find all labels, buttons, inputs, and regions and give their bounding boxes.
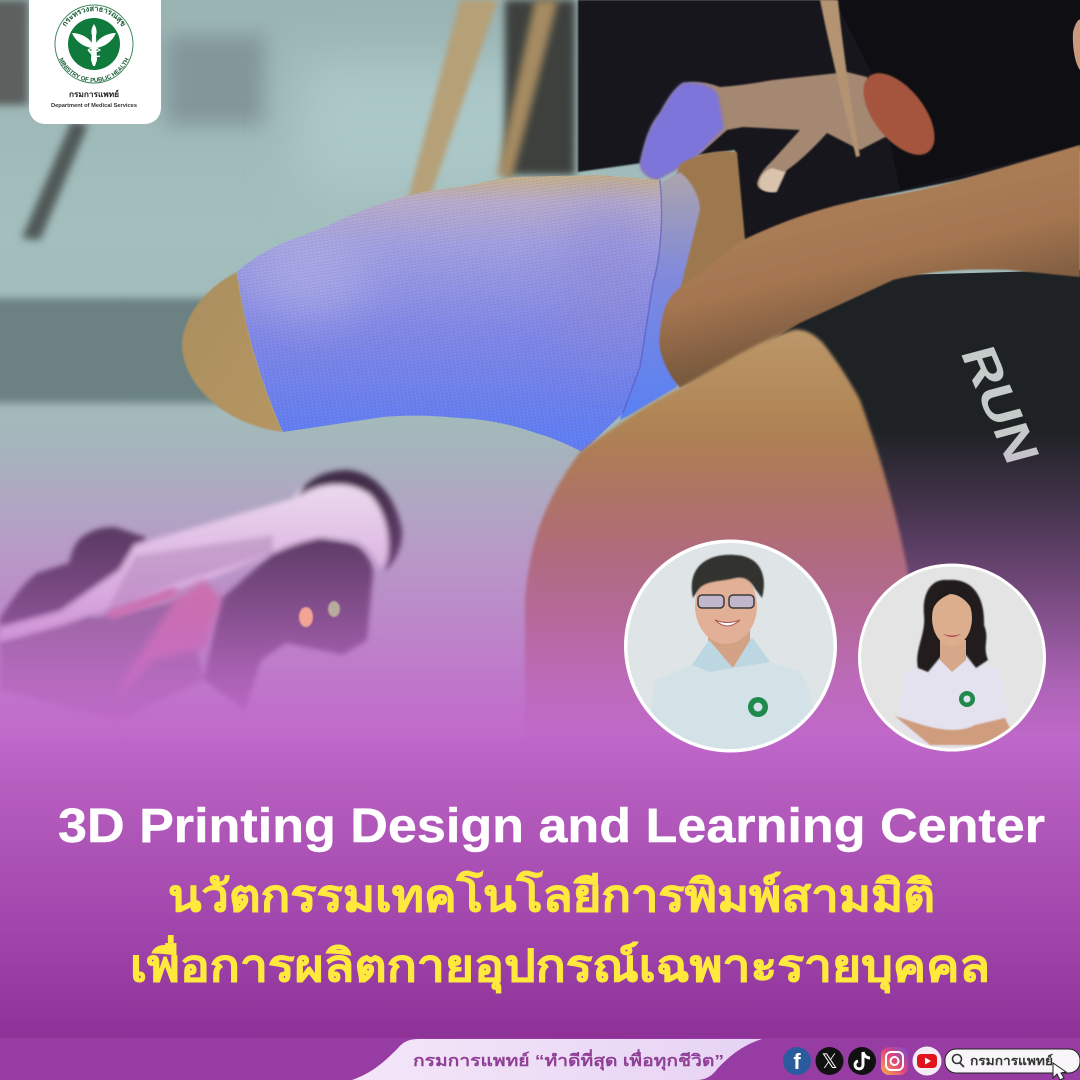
icon: facebook	[783, 1047, 811, 1075]
icon: facebook: f	[793, 1049, 801, 1074]
icon: x: 𝕏	[821, 1051, 838, 1073]
thai headline line 1: นวัตกรรมเทคโนโลยีการพิมพ์สามมิติ	[168, 869, 935, 921]
logo card: Department of Medical Services	[51, 103, 137, 109]
lanyard tag	[820, 0, 860, 157]
portrait: woman	[855, 560, 1050, 755]
icon: ministry of public health seal: MINISTRY OF PUBLIC HEALTH	[59, 58, 129, 82]
thigh	[525, 330, 930, 740]
blue sock	[237, 175, 662, 452]
lower purple panel	[0, 738, 1080, 1080]
footer bar	[0, 1038, 1080, 1080]
leg skin behind sock	[650, 151, 746, 300]
stump tan tip	[182, 272, 283, 432]
scanner device	[0, 470, 402, 720]
search box: กรมการแพทย์	[970, 1053, 1053, 1068]
title: 3D Printing Design and Learning Center	[58, 800, 1045, 853]
forearm and hand	[659, 145, 1080, 388]
icon: ministry of public health seal	[54, 4, 134, 84]
logo card	[29, 0, 161, 124]
thai headline line 2: เพื่อการผลิตกายอุปกรณ์เฉพาะรายบุคคล	[130, 935, 990, 994]
dark clothing behind hands	[578, 0, 1080, 260]
search box	[945, 1049, 1080, 1080]
black shorts	[760, 270, 1080, 800]
icon: ministry of public health seal: กระทรวงสาธารณสุข	[62, 6, 126, 27]
icon: youtube	[912, 1046, 942, 1076]
icon: scanner status lights	[299, 601, 340, 627]
portrait: man	[620, 540, 840, 760]
title	[58, 800, 1045, 994]
background photo: prosthetic fitting scene	[0, 0, 1080, 722]
slogan ribbon: กรมการแพทย์ “ทำดีที่สุด เพื่อทุกชีวิต”	[413, 1049, 724, 1071]
icon: tiktok	[848, 1047, 876, 1075]
icon: instagram	[881, 1047, 908, 1075]
icon: cursor	[1053, 1063, 1066, 1080]
RUN lettering: RUN	[949, 341, 1050, 469]
hand holding sock	[640, 72, 893, 192]
gradient overlay	[0, 430, 1080, 740]
slogan ribbon	[352, 1039, 762, 1080]
icon: x	[816, 1047, 844, 1075]
logo caption: กรมการแพทย์	[69, 89, 119, 99]
